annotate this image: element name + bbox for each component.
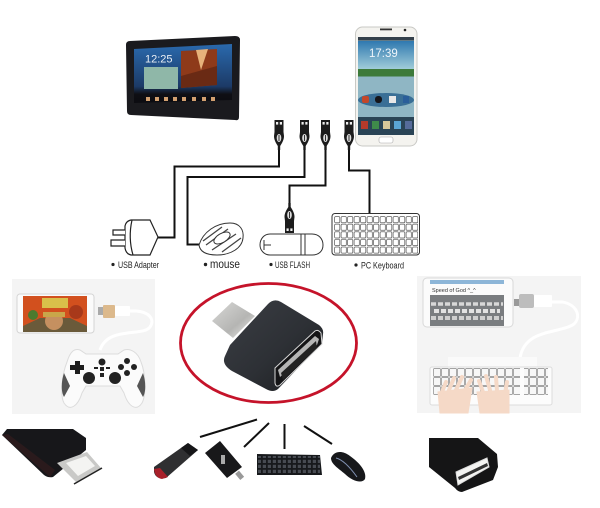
phone app row <box>358 93 414 107</box>
tablet weather widget <box>144 67 178 89</box>
callout: red ellipse with OTG adapter <box>180 284 356 402</box>
phone top wallpaper <box>358 41 414 71</box>
phone dock <box>358 117 414 135</box>
icon: USB plug to flash drive <box>284 203 294 233</box>
port inner tongue <box>278 336 319 377</box>
icon: USB plug 3 <box>320 120 330 150</box>
icon: PC keyboard <box>332 214 420 255</box>
landscape phone <box>423 278 513 327</box>
tablet screen <box>134 44 232 103</box>
photo: black keyboard <box>257 454 322 475</box>
photo: USB flash drive <box>154 443 198 479</box>
label: USB Adapter <box>111 260 159 270</box>
panel: phone with keyboard <box>417 276 581 413</box>
label: mouse: mouse <box>210 257 240 271</box>
icon: smartphone <box>356 27 417 146</box>
black adapter body <box>224 300 323 391</box>
white cable <box>520 302 578 358</box>
icon: USB plug 2 <box>300 120 310 150</box>
accessory link lines <box>200 420 332 449</box>
photo: card reader <box>205 441 244 480</box>
micro USB metal connector <box>212 302 255 338</box>
label: USB FLASH <box>269 260 310 270</box>
tablet app dock <box>146 97 215 101</box>
white game controller <box>62 350 145 407</box>
photo: black mouse <box>331 452 365 481</box>
wires from USB plugs to accessories <box>158 148 370 244</box>
game screen <box>23 296 87 332</box>
landscape phone <box>17 294 94 333</box>
screen text: Speed of God ^_^ <box>432 288 476 294</box>
USB-A port <box>275 330 322 386</box>
label: USB FLASH: USB FLASH <box>275 260 310 270</box>
icon: tablet <box>126 36 240 120</box>
white cable <box>100 311 152 350</box>
icon: wireless mouse <box>199 223 243 255</box>
label: PC Keyboard: PC Keyboard <box>361 260 404 270</box>
panel: phone with game controller <box>12 279 155 414</box>
silver OTG adapter <box>514 294 552 308</box>
phone clock: 17:39 <box>369 48 398 60</box>
on-screen keyboard <box>430 295 504 326</box>
photo: micro USB plug close-up <box>2 429 102 484</box>
photo: USB-A socket close-up <box>429 438 498 492</box>
icon: USB plug 1 <box>274 120 284 150</box>
white keyboard <box>430 357 552 405</box>
label: USB Adapter: USB Adapter <box>118 260 159 270</box>
tablet wallpaper artwork <box>181 49 217 88</box>
icon: USB flash drive <box>260 234 323 255</box>
OTG adapter <box>98 305 130 318</box>
icon: USB power adapter <box>111 220 158 255</box>
phone speaker and home button <box>379 28 406 143</box>
typing hands <box>438 376 509 413</box>
tablet clock: 12:25 <box>145 54 173 66</box>
icon: USB plug 4 <box>344 120 354 150</box>
